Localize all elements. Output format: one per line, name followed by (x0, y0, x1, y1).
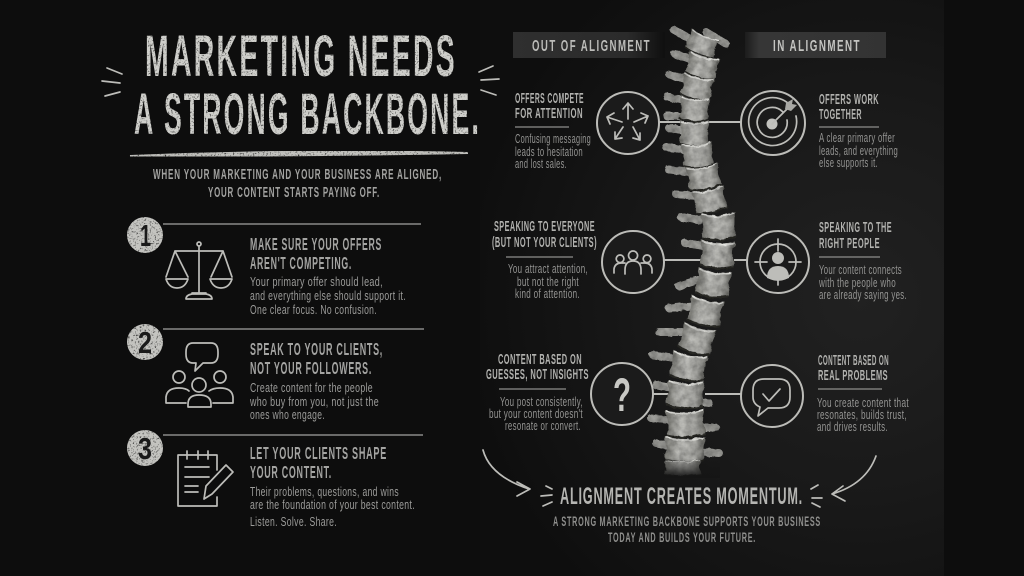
heading: FOR ATTENTION (515, 106, 583, 122)
title sparks right (479, 66, 499, 95)
icon: scales (166, 242, 232, 299)
closing text: TODAY AND BUILDS YOUR FUTURE. (608, 530, 756, 545)
text: and lost sales. (515, 157, 567, 171)
step 2 (127, 324, 424, 422)
text: leads, and everything (819, 144, 898, 158)
title underline (130, 152, 468, 156)
text (818, 263, 907, 302)
subtitle (153, 167, 442, 201)
step 3 body: Listen. Solve. Share. (250, 514, 337, 529)
number badge 1: 1 (140, 218, 151, 253)
text (515, 132, 591, 171)
arrow: left curved (483, 450, 530, 496)
closing text (553, 514, 821, 545)
in alignment item 2 (747, 220, 907, 302)
step 1 body: and everything else should support it. (250, 288, 406, 303)
heading: RIGHT PEOPLE (819, 236, 880, 252)
step 3 heading: LET YOUR CLIENTS SHAPE (250, 443, 387, 463)
step 3 body: Their problems, questions, and wins (250, 484, 399, 499)
text: Your content connects (819, 263, 902, 277)
subtitle: YOUR CONTENT STARTS PAYING OFF. (208, 185, 380, 201)
icon: target with arrow (741, 91, 805, 155)
text (819, 131, 898, 170)
icon: question mark: ? (613, 368, 631, 421)
title sparks left (102, 68, 122, 96)
transverse processes (651, 30, 726, 453)
heading: (BUT NOT YOUR CLIENTS) (492, 235, 597, 251)
text: but not the right (517, 275, 579, 289)
text: Confusing messaging (515, 132, 591, 146)
number badge 2: 2 (138, 325, 152, 360)
text: You post consistently, (500, 395, 583, 409)
text: with the people who (818, 276, 896, 290)
step 3 (127, 430, 423, 529)
text: resonates, builds trust, (817, 408, 907, 422)
text: are already saying yes. (819, 288, 907, 302)
heading (819, 220, 892, 252)
text (817, 396, 909, 434)
text: and drives results. (817, 420, 888, 434)
out of alignment item 2 (492, 219, 664, 301)
heading: TOGETHER (819, 107, 862, 123)
number badge 2 (127, 324, 163, 360)
spine illustration (651, 28, 736, 476)
out of alignment item 3 (486, 352, 653, 433)
in alignment item 3: CONTENT BASED ON (818, 353, 889, 369)
out of alignment item 1: OFFERS COMPETE (515, 91, 584, 107)
step 1: MAKE SURE YOUR OFFERS (250, 234, 382, 254)
text: but your content doesn't (489, 407, 583, 421)
text: A STRONG BACKBONE. (134, 82, 481, 147)
connector lines (653, 122, 748, 394)
heading: CONTENT BASED ON (498, 352, 582, 368)
text (508, 262, 588, 301)
heading: SPEAKING TO THE (819, 220, 892, 236)
step 1 body: One clear focus. No confusion. (250, 302, 377, 317)
text: else supports it. (819, 156, 878, 170)
step 3 heading: YOUR CONTENT. (250, 462, 332, 482)
text: resonate or convert. (505, 419, 581, 433)
number badge 3: 3 (138, 431, 152, 466)
step 3 heading (250, 443, 387, 482)
text (489, 395, 583, 433)
icon: chat bubble with check (741, 365, 803, 427)
step 2 heading: SPEAK TO YOUR CLIENTS, (250, 339, 383, 359)
step 2 heading: NOT YOUR FOLLOWERS. (250, 358, 372, 378)
chalkboard panel (480, 0, 944, 576)
step 2 heading (250, 339, 383, 378)
step 3 body: are the foundation of your best content. (250, 497, 415, 512)
icon: three people (602, 231, 664, 293)
title: MARKETING NEEDS (145, 24, 457, 89)
step 1 (127, 217, 421, 317)
number badge 3 (127, 430, 163, 466)
heading (819, 92, 879, 123)
icon: audience with speech bubble (166, 343, 233, 407)
banner: out of alignment (513, 32, 665, 58)
heading: SPEAKING TO EVERYONE (494, 219, 595, 235)
banner: out of alignment: OUT OF ALIGNMENT (532, 38, 651, 55)
heading (492, 219, 597, 251)
heading (818, 353, 889, 384)
icon: person in crosshair (747, 231, 809, 293)
heading: OFFERS WORK (819, 92, 879, 108)
step 3 body (250, 484, 415, 529)
text: You create content that (817, 396, 909, 410)
step 1 body (250, 274, 406, 317)
step 1 body: Your primary offer should lead, (250, 274, 383, 289)
in alignment item 1 (741, 91, 898, 170)
arrow: right curved (832, 456, 876, 501)
icon: question mark (591, 363, 653, 425)
heading (515, 91, 584, 122)
text: You attract attention, (508, 262, 588, 276)
banner: in alignment (745, 32, 886, 58)
heading (486, 352, 589, 383)
momentum sparks (541, 485, 822, 507)
in alignment item 3 (741, 353, 909, 434)
out of alignment item 1 (515, 91, 659, 171)
step 2 body (249, 380, 379, 422)
banner: in alignment: IN ALIGNMENT (773, 38, 861, 55)
vertebrae (664, 28, 736, 476)
step 1 heading (250, 234, 382, 273)
step 1 heading: AREN'T COMPETING. (250, 253, 352, 273)
text: A clear primary offer (819, 131, 895, 145)
text: leads to hesitation (515, 145, 583, 159)
heading: REAL PROBLEMS (818, 368, 888, 384)
subtitle: WHEN YOUR MARKETING AND YOUR BUSINESS ARE ALIGNED, (153, 167, 442, 183)
step 2 body: who buy from you, not just the (249, 394, 379, 409)
text: kind of attention. (515, 287, 580, 301)
step 2 body: Create content for the people (250, 380, 373, 395)
title (134, 24, 481, 147)
number badge 1 (127, 217, 163, 253)
icon: notepad and pencil (178, 451, 233, 506)
heading: GUESSES, NOT INSIGHTS (486, 367, 589, 383)
icon: scattered arrows (597, 92, 659, 154)
spine bottom fade (650, 458, 720, 478)
step 2 body: ones who engage. (250, 407, 325, 422)
momentum heading: ALIGNMENT CREATES MOMENTUM. (560, 483, 803, 510)
